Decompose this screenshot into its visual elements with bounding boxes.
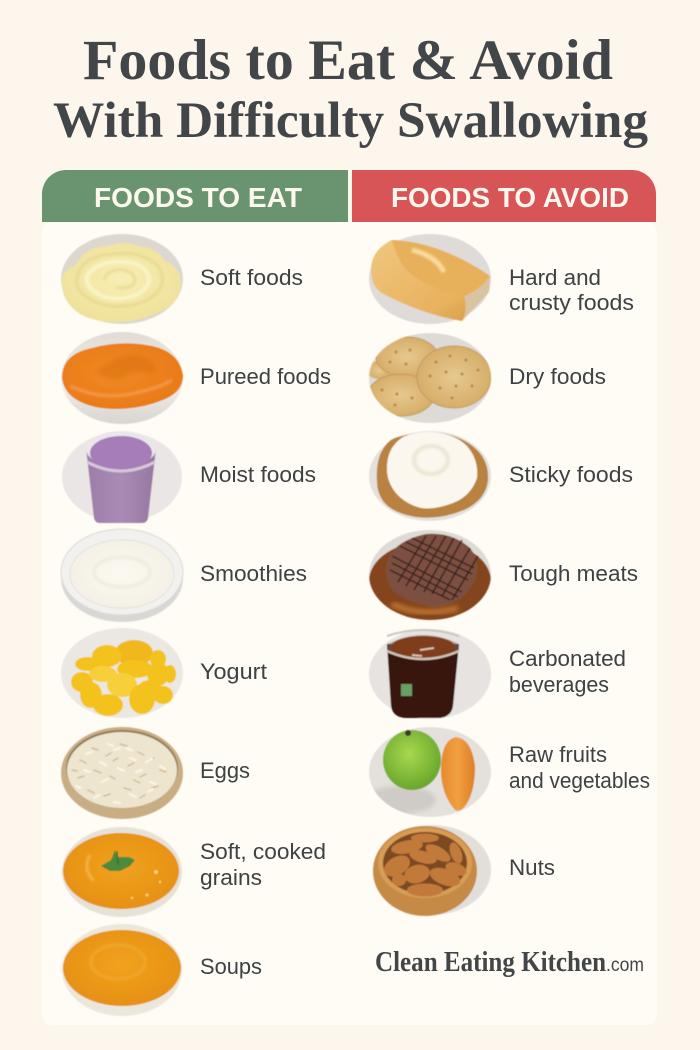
label: sticky foods: Sticky foods bbox=[509, 462, 633, 487]
label: tough meats: Tough meats bbox=[509, 561, 638, 586]
panel: foods to avoid list bbox=[364, 234, 650, 978]
label: soups: Soups bbox=[200, 954, 262, 979]
panel header: foods to eat: FOODS TO EAT bbox=[94, 182, 302, 213]
label: dry foods: Dry foods bbox=[509, 364, 606, 389]
label: smoothies: Smoothies bbox=[200, 561, 307, 586]
label: raw fruits and vegetables: and vegetables bbox=[509, 768, 650, 793]
label: pureed foods: Pureed foods bbox=[200, 364, 331, 389]
panel header: foods to avoid: FOODS TO AVOID bbox=[391, 182, 629, 213]
food image: almonds in bowl bbox=[373, 825, 491, 916]
label: soft, cooked grains: grains bbox=[200, 865, 262, 890]
label: nuts: Nuts bbox=[509, 855, 555, 880]
food image: mashed potatoes bbox=[61, 234, 183, 324]
panel: table background bbox=[42, 222, 657, 1025]
title bbox=[53, 29, 648, 149]
brand credit: Clean Eating Kitchen bbox=[375, 947, 606, 978]
label: raw fruits and vegetables: Raw fruits bbox=[509, 742, 607, 767]
food image: yellow fruit chunks bbox=[61, 628, 183, 718]
brand credit: .com bbox=[606, 955, 644, 976]
food image: crusty bread bbox=[369, 234, 491, 324]
label: hard and crusty foods: Hard and bbox=[509, 265, 601, 290]
label: soft, cooked grains: Soft, cooked bbox=[200, 839, 326, 864]
title: With Difficulty Swallowing bbox=[53, 93, 648, 149]
panel: foods to eat list bbox=[61, 234, 331, 1016]
food image: yogurt bowl bbox=[61, 529, 183, 622]
panel header: foods to avoid bbox=[352, 170, 656, 222]
label: soft foods: Soft foods bbox=[200, 265, 303, 290]
label: eggs: Eggs bbox=[200, 758, 250, 783]
food image: carbonated beverage bbox=[369, 629, 491, 719]
label: carbonated beverages: Carbonated bbox=[509, 646, 626, 671]
food image: smoothie glass bbox=[62, 431, 182, 523]
food image: soup bowl bbox=[62, 924, 182, 1016]
food image: frosted cookie bbox=[369, 431, 491, 521]
label: yogurt: Yogurt bbox=[200, 659, 267, 684]
label: carbonated beverages: beverages bbox=[509, 672, 609, 697]
panel header: foods to eat bbox=[42, 170, 348, 222]
label: moist foods: Moist foods bbox=[200, 462, 316, 487]
food image: soup with herb bbox=[62, 827, 182, 917]
title: Foods to Eat & Avoid bbox=[83, 29, 613, 92]
food image: crackers bbox=[367, 333, 491, 423]
food image: apple and carrot bbox=[364, 727, 491, 817]
food image: pureed foods bbox=[61, 332, 183, 424]
food image: rice bowl bbox=[61, 727, 183, 819]
food image: tough meat bbox=[369, 530, 491, 621]
label: hard and crusty foods: crusty foods bbox=[509, 290, 634, 315]
